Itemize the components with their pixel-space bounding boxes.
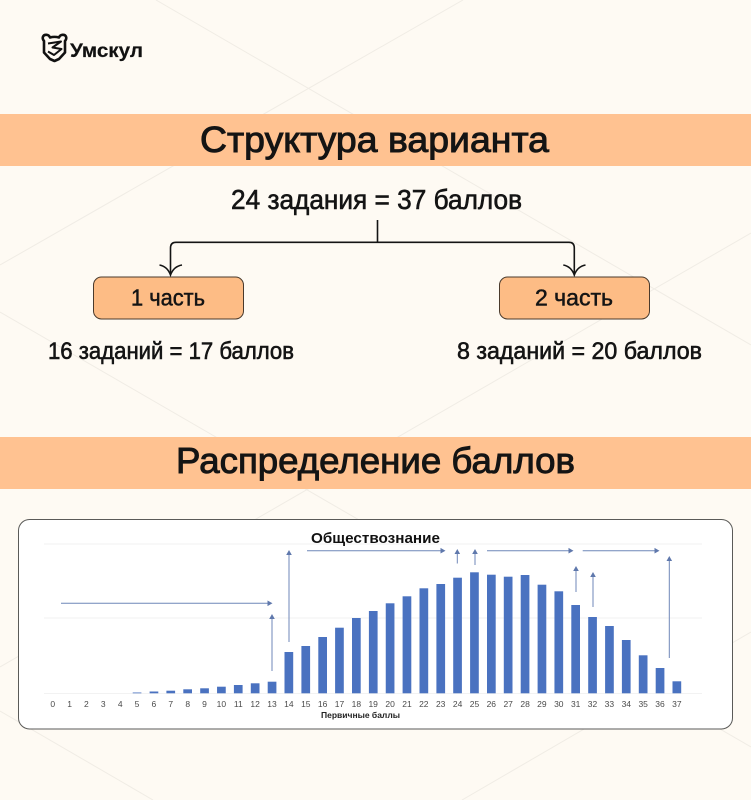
x axis labels: 3 — [101, 699, 106, 709]
x axis labels: 12 — [250, 699, 260, 709]
x axis labels: 21 — [402, 699, 412, 709]
x axis labels: 31 — [571, 699, 581, 709]
heading band: Структура варианта: Структура варианта — [200, 119, 550, 160]
heading band: Распределение баллов: Распределение баллов — [176, 440, 575, 481]
x axis title: Первичные баллы — [321, 711, 400, 720]
x axis labels: 25 — [470, 699, 479, 709]
x axis labels: 32 — [588, 699, 597, 709]
x axis labels: 30 — [554, 699, 564, 709]
x axis labels: 17 — [335, 699, 344, 709]
x axis labels: 0 — [50, 699, 55, 709]
x axis labels: 8 — [185, 699, 190, 709]
icon: bear head — [43, 35, 66, 61]
x axis labels: 11 — [234, 699, 243, 709]
heading band: Структура варианта — [0, 114, 751, 166]
x axis labels: 15 — [301, 699, 311, 709]
chart title: Обществознание — [311, 530, 440, 547]
x axis labels: 9 — [202, 699, 207, 709]
x axis labels: 23 — [436, 699, 446, 709]
x axis labels: 33 — [605, 699, 614, 709]
x axis labels: 10 — [217, 699, 226, 709]
x axis labels: 1 — [67, 699, 72, 709]
panel: part 2: 2 часть — [535, 284, 613, 310]
x axis labels: 2 — [84, 699, 89, 709]
x axis labels: 28 — [520, 699, 530, 709]
x axis labels: 20 — [385, 699, 395, 709]
x axis labels: 36 — [655, 699, 665, 709]
part 1 summary text: 16 заданий = 17 баллов — [48, 338, 294, 365]
x axis labels: 27 — [503, 699, 513, 709]
x axis labels: 29 — [537, 699, 547, 709]
x axis labels: 37 — [672, 699, 682, 709]
heading band: Распределение баллов — [0, 437, 751, 489]
x axis labels: 5 — [135, 699, 140, 709]
panel: score distribution chart — [18, 520, 732, 729]
x axis labels: 6 — [152, 699, 157, 709]
x axis labels — [50, 699, 682, 709]
x axis labels: 13 — [267, 699, 277, 709]
x axis labels: 14 — [284, 699, 294, 709]
x axis labels: 16 — [318, 699, 328, 709]
bar chart — [133, 572, 681, 693]
x axis labels: 22 — [419, 699, 429, 709]
panel: part 1 — [94, 277, 244, 319]
panel: part 2 — [500, 277, 650, 319]
x axis labels: 35 — [638, 699, 648, 709]
arrow: branching connector — [160, 220, 586, 275]
arrows: score ranges — [61, 548, 672, 671]
x axis labels: 24 — [453, 699, 463, 709]
x axis labels: 26 — [487, 699, 496, 709]
x axis labels: 34 — [622, 699, 631, 709]
part 2 summary text: 8 заданий = 20 баллов — [457, 338, 702, 365]
total tasks text: 24 задания = 37 баллов — [231, 184, 522, 215]
panel: part 1: 1 часть — [131, 284, 205, 310]
x axis labels: 19 — [368, 699, 378, 709]
x axis labels: 7 — [168, 699, 173, 709]
logo wordmark: Умскул — [70, 40, 143, 62]
logo: Умскул — [43, 35, 143, 62]
x axis labels: 4 — [118, 699, 123, 709]
x axis labels: 18 — [352, 699, 361, 709]
